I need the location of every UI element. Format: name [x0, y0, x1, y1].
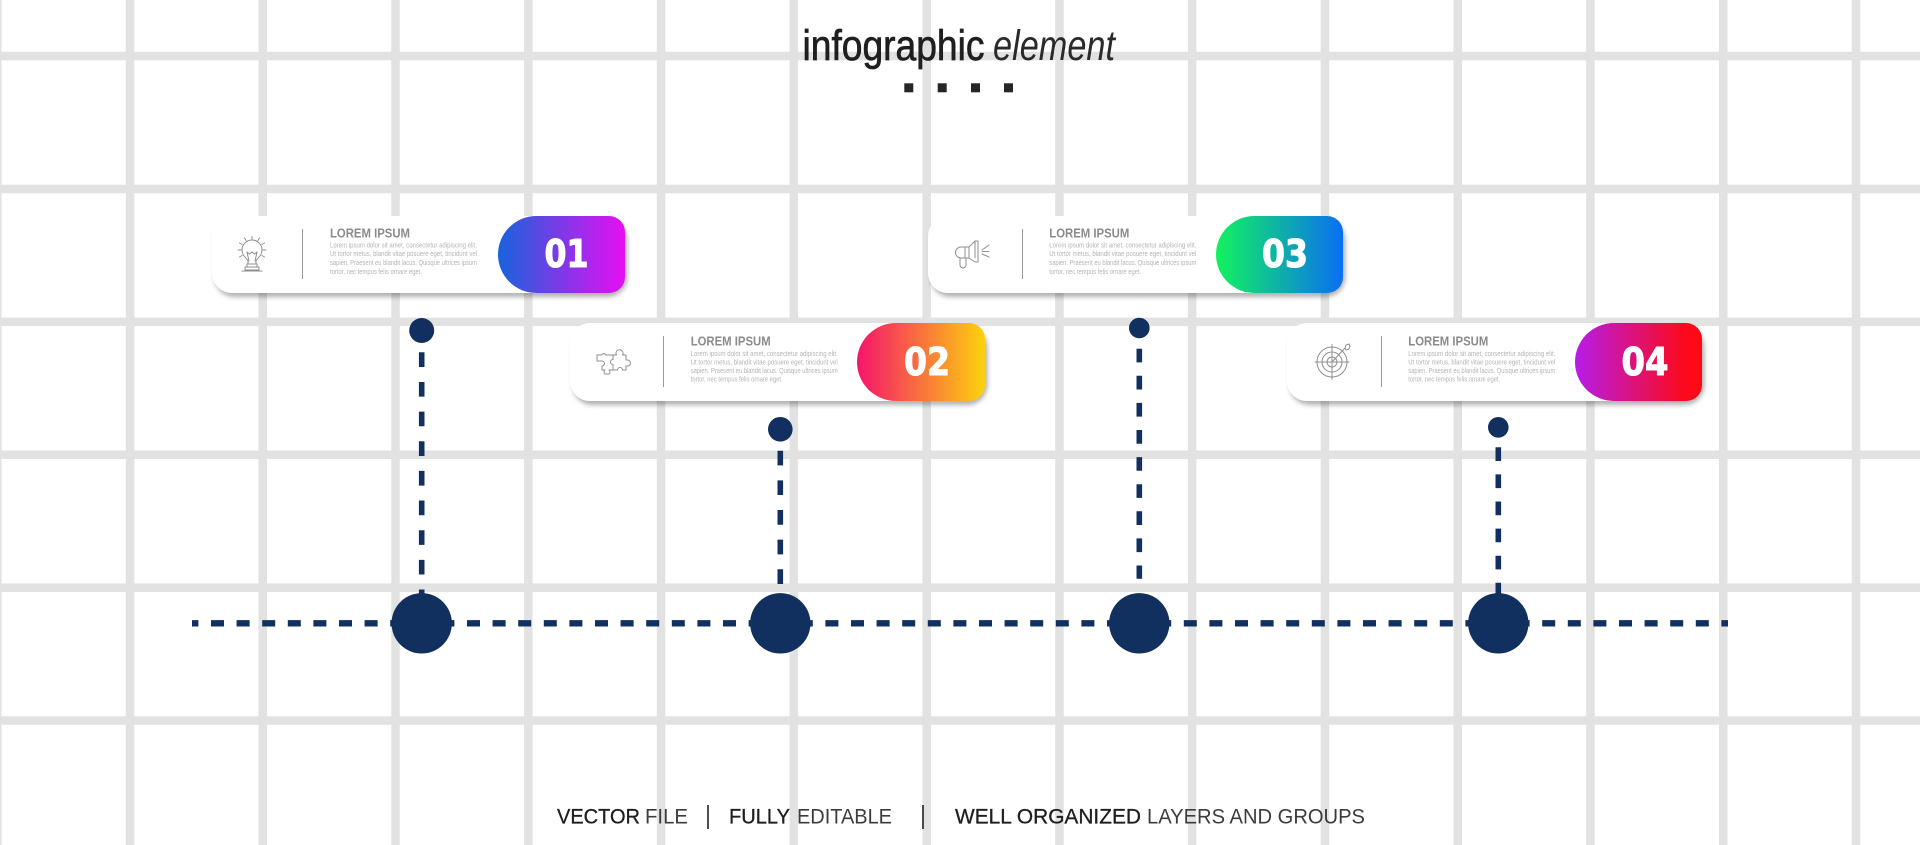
connector 1 [409, 318, 434, 596]
title dots [904, 83, 1013, 92]
footer tagline: EDITABLE [797, 806, 892, 828]
card background [928, 216, 1343, 293]
number badge 04: 04 [1622, 340, 1668, 384]
text block: sapien. Praesent eu blandit lacus. Quisque ultrices ipsum [691, 366, 838, 375]
card background [212, 216, 625, 293]
text block: tortor, nec tempus felis ornare eget. [691, 374, 783, 384]
icon: light bulb [238, 236, 266, 271]
text block: LOREM IPSUM [1049, 226, 1129, 241]
text block: Lorem ipsum dolor sit amet, consectetur adipiscing elit. [1049, 240, 1196, 250]
text block [1049, 226, 1197, 276]
text block: Ut tortor metus, blandit vitae posuere eget, tincidunt vel [330, 249, 477, 258]
card background [1287, 323, 1702, 401]
text block [1408, 334, 1556, 384]
text block: Lorem ipsum dolor sit amet, consectetur adipiscing elit. [1408, 349, 1555, 358]
text block: Lorem ipsum dolor sit amet, consectetur adipiscing elit. [691, 349, 838, 358]
number badge 02 [857, 323, 985, 401]
footer tagline: VECTOR [557, 806, 640, 828]
text block: LOREM IPSUM [691, 334, 771, 349]
panel: step 04 [1287, 323, 1702, 401]
divider [1380, 336, 1382, 387]
panel: step 01 [212, 216, 625, 293]
footer tagline: WELL ORGANIZED [955, 806, 1141, 828]
number badge 01 [498, 216, 625, 293]
timeline node 3 [1109, 593, 1170, 654]
panel: step 03 [928, 216, 1343, 293]
divider [302, 229, 304, 279]
card background [570, 323, 985, 401]
horizontal timeline [192, 620, 1728, 626]
title: element [993, 22, 1117, 70]
footer tagline: FILE [645, 806, 688, 828]
text block: tortor, nec tempus felis ornare eget. [1408, 374, 1500, 384]
divider [662, 336, 664, 387]
number badge 02: 02 [904, 340, 950, 384]
text block: Ut tortor metus, blandit vitae posuere eget, tincidunt vel [691, 357, 838, 366]
text block: sapien. Praesent eu blandit lacus. Quisque ultrices ipsum [1049, 258, 1196, 267]
footer tagline [557, 805, 1365, 829]
number badge 03: 03 [1262, 232, 1308, 276]
title: infographic [802, 22, 984, 70]
connector 4 [1488, 417, 1509, 596]
text block: Ut tortor metus, blandit vitae posuere eget, tincidunt vel [1049, 249, 1197, 258]
text block [330, 226, 477, 276]
timeline node 4 [1468, 593, 1529, 654]
footer tagline: FULLY [729, 806, 790, 828]
timeline node 2 [750, 593, 810, 654]
connector 3 [1129, 318, 1150, 579]
number badge 04 [1575, 323, 1702, 401]
number badge 01: 01 [544, 232, 588, 276]
divider [1022, 229, 1024, 279]
text block: tortor, nec tempus felis ornare eget. [1049, 267, 1141, 276]
text block: Ut tortor metus, blandit vitae posuere eget, tincidunt vel [1408, 357, 1556, 366]
text block [691, 334, 838, 384]
icon: megaphone [956, 241, 989, 268]
title [802, 22, 1117, 70]
connector 2 [768, 417, 793, 584]
panel: step 02 [570, 323, 985, 401]
text block: Lorem ipsum dolor sit amet, consectetur adipiscing elit. [330, 240, 477, 250]
text block: LOREM IPSUM [1408, 334, 1488, 349]
text block: LOREM IPSUM [330, 226, 410, 241]
footer tagline: LAYERS AND GROUPS [1147, 806, 1365, 828]
text block: tortor, nec tempus felis ornare eget. [330, 267, 422, 276]
text block: sapien. Praesent eu blandit lacus. Quisque ultrices ipsum [330, 258, 477, 267]
icon: puzzle pieces [597, 350, 630, 374]
timeline node 1 [392, 593, 452, 654]
text block: sapien. Praesent eu blandit lacus. Quisque ultrices ipsum [1408, 366, 1555, 375]
number badge 03 [1216, 216, 1343, 293]
icon: target [1315, 344, 1350, 380]
